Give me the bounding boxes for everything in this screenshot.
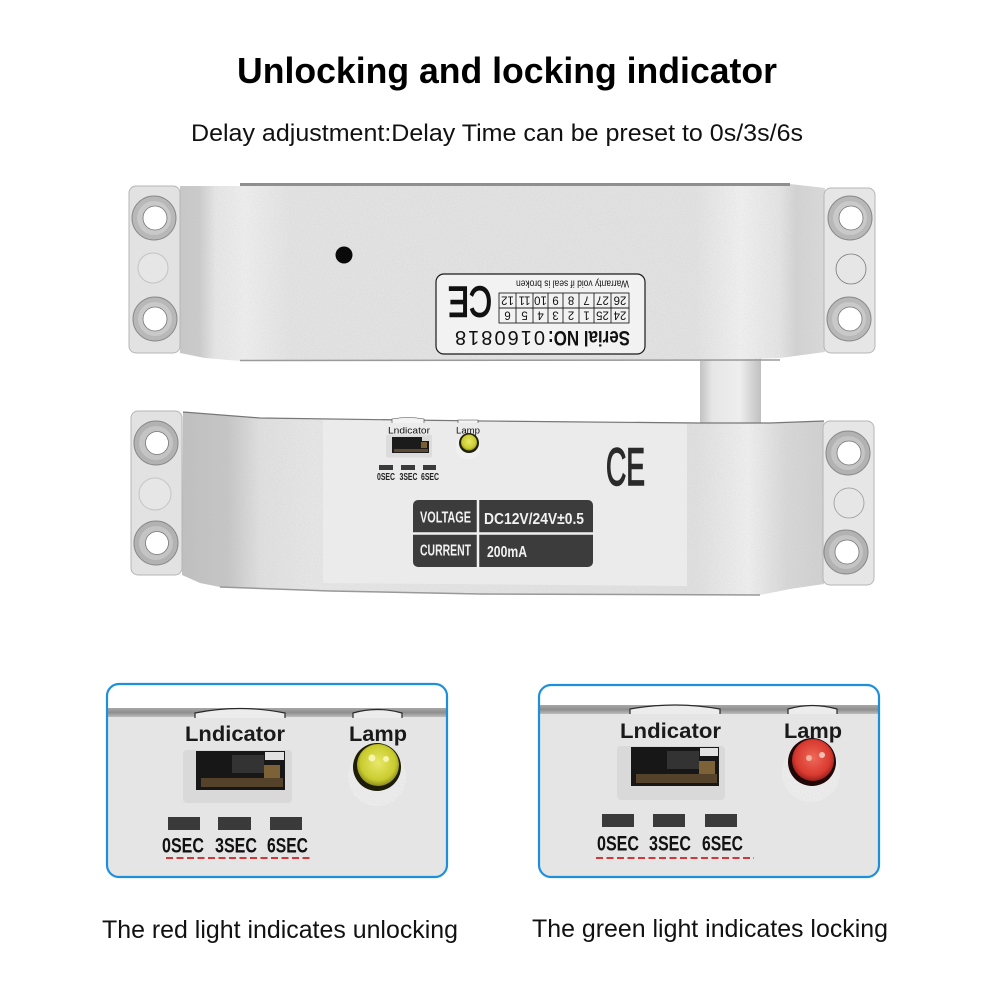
lamp heading: Lamp [784,720,842,743]
black screw hole [336,246,352,264]
delay switch [183,750,292,803]
lock body: front view [131,411,874,595]
front label [323,418,687,586]
device top edge [100,708,460,717]
caption: unlocking: The red light indicates unlocking [102,916,458,944]
indicator heading: Lndicator [185,723,285,746]
delay markers: 6SEC [702,832,743,856]
indicator heading: Lndicator [388,426,430,436]
terminal number table: 10 [534,294,547,306]
delay markers: 3SEC [215,834,257,858]
lock body: rear view [129,184,875,361]
serial number [455,326,630,349]
left mounting flange [129,186,180,353]
terminal number table: 9 [552,294,559,306]
terminal number table: 4 [537,308,544,320]
specification table [413,500,593,567]
panel border [107,684,447,877]
serial number: Serial NO: [548,326,630,349]
panel: green light detail [530,685,890,880]
panel border [539,685,879,877]
terminal number table: 2 [568,308,574,320]
notches [630,705,837,714]
notches [195,708,402,718]
delay switch [386,434,432,458]
specification table: CURRENT [420,542,471,560]
lamp LED [456,433,480,460]
terminal number table: 1 [583,308,590,320]
delay markers [162,817,308,858]
terminal number table: 7 [583,294,590,306]
right mounting flange [824,188,875,353]
CE mark: CE [448,277,492,325]
lamp LED: red [782,738,840,802]
lamp LED: yellow [348,743,406,806]
warranty note: Warranty void if seal is broken [516,278,629,290]
terminal number table: 26 [614,294,626,306]
terminal number table: 8 [568,294,574,306]
subtitle: Delay adjustment:Delay Time can be preset to 0s/3s/6s [191,120,803,147]
small delay markers: 6SEC [421,472,439,483]
CE mark: CE [606,438,645,497]
terminal number table: 5 [521,308,528,320]
small delay markers: 3SEC [400,472,418,483]
delay markers [597,814,743,856]
title: Unlocking and locking indicator [237,50,777,91]
specification table: 200mA [487,544,527,561]
serial label (upside down) [436,274,645,354]
terminal number table: 6 [504,308,511,320]
right mounting flange [823,421,874,585]
caption: locking: The green light indicates locking [532,915,888,943]
small delay markers: 0SEC [377,472,395,483]
red dashed underline [596,857,754,859]
device face [108,717,446,876]
terminal number table: 11 [519,294,530,306]
notches on the top edge [392,418,478,423]
pin: lock bolt between the two parts [700,358,761,424]
front body casing [182,412,824,595]
delay markers: 0SEC [597,832,639,856]
device top edge [530,705,890,714]
delay switch [617,746,725,800]
panel: red light detail [100,684,460,881]
small delay markers [377,465,439,483]
terminal number table: 25 [596,308,609,320]
terminal number table: 12 [501,294,514,306]
specification table: VOLTAGE [420,510,471,526]
red dashed underline [166,857,313,859]
terminal number table: 24 [613,308,626,320]
delay markers: 3SEC [649,832,691,856]
left mounting flange [131,411,182,575]
terminal number table: 3 [552,308,559,320]
serial number: 0160818 [455,326,545,348]
terminal number table: 27 [596,294,609,306]
rear body casing [180,184,825,361]
indicator heading: Lndicator [620,720,721,743]
terminal number table [499,293,629,323]
specification table: DC12V/24V±0.5 [484,511,584,528]
device face [540,714,878,876]
lamp heading: Lamp [349,723,407,746]
lamp heading: Lamp [456,426,480,436]
delay markers: 0SEC [162,834,204,858]
delay markers: 6SEC [267,834,308,858]
